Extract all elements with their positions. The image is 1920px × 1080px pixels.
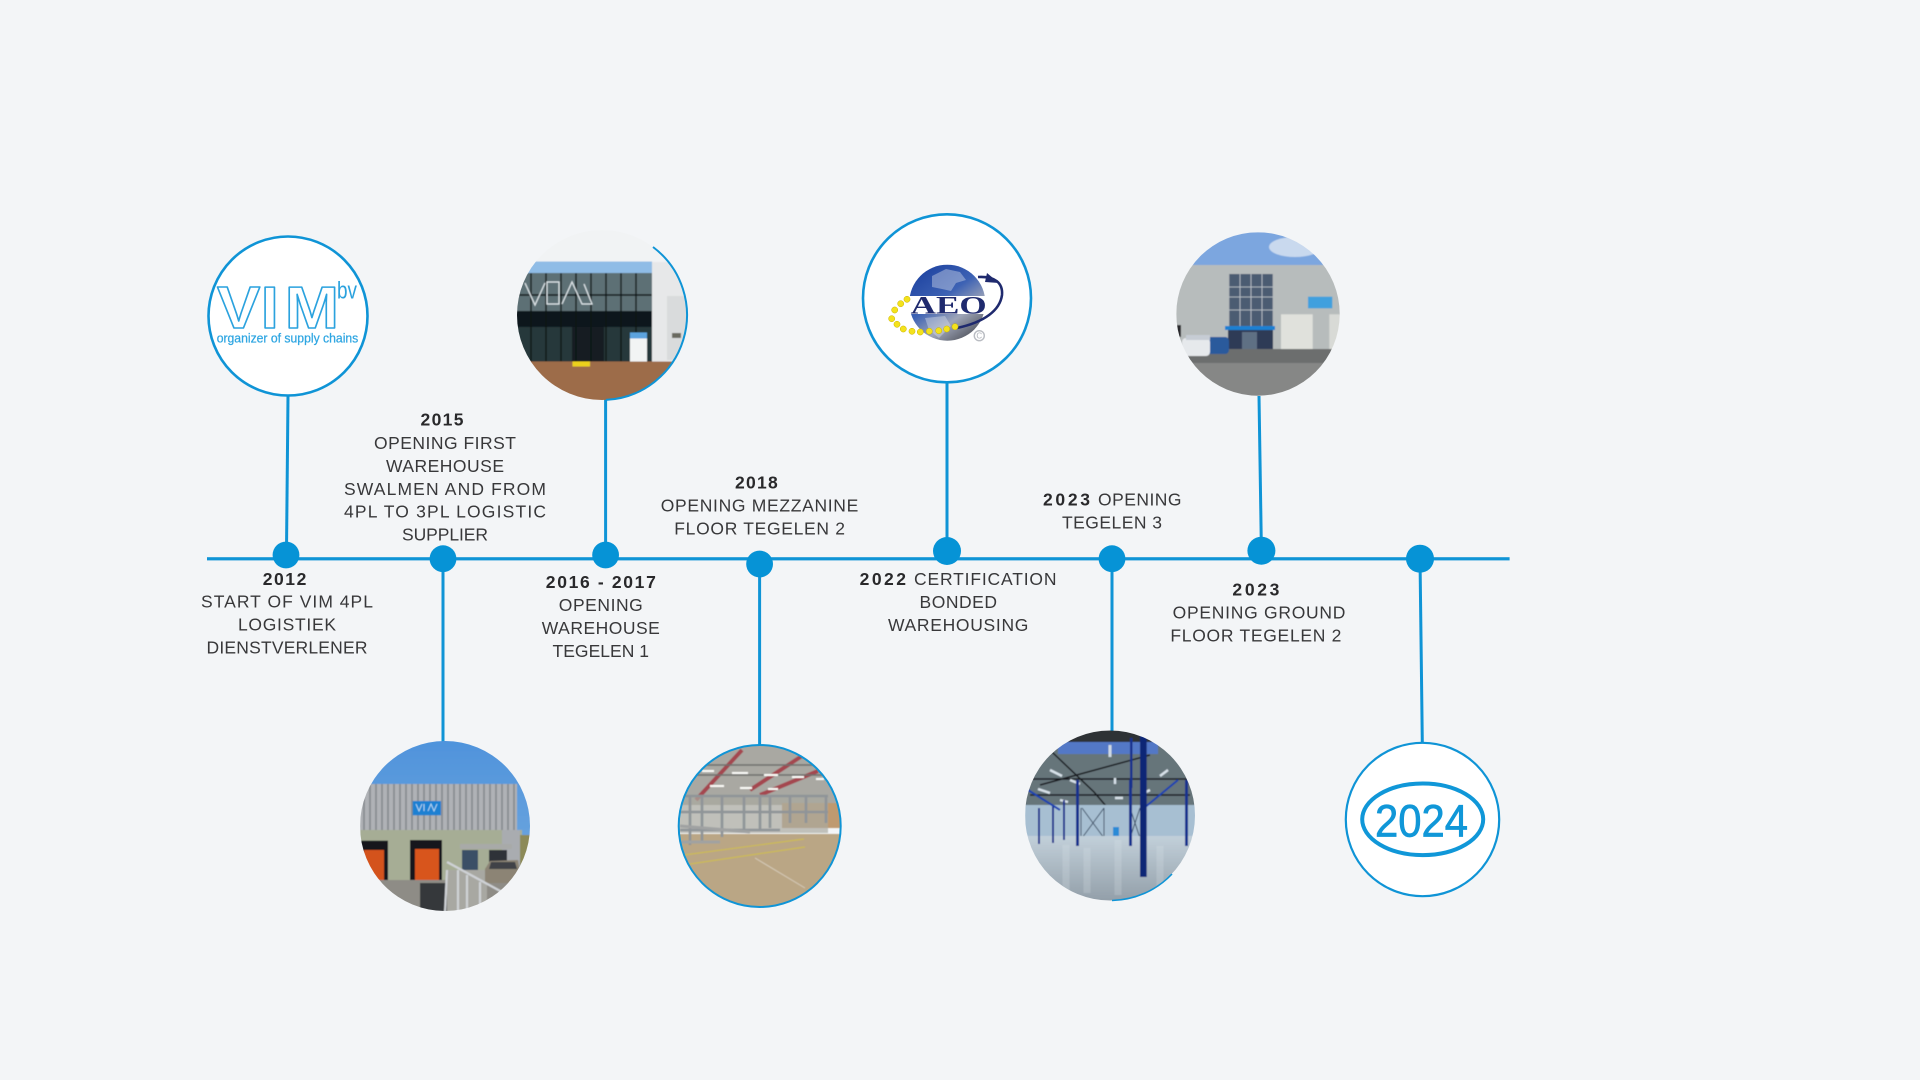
ground (378, 879, 508, 908)
copyright mark: C (976, 332, 982, 341)
railing (445, 862, 502, 913)
milestone 2023 ground floor: OPENING GROUND (1173, 603, 1345, 623)
milestone 2012: 2012 (263, 569, 307, 589)
sky (371, 741, 530, 836)
milestone 2015: SUPPLIER (402, 525, 488, 545)
roof purlins (690, 765, 830, 775)
milestone 2022: 2022 (860, 569, 906, 589)
stars (889, 296, 958, 335)
car (485, 860, 520, 883)
milestone 2023 ground floor (1170, 580, 1345, 646)
horizontal timeline axis (207, 557, 1510, 560)
back wall (1025, 805, 1196, 839)
logo suffix: bv (337, 278, 357, 304)
floor lines (684, 839, 805, 864)
timeline dots (273, 537, 1434, 577)
windows (1229, 274, 1273, 326)
circle: storefront photo (517, 261, 686, 400)
ceiling (678, 745, 842, 805)
wall sign (1308, 297, 1332, 308)
window lettering marks (525, 282, 592, 305)
milestone 2015: OPENING FIRST (374, 433, 516, 453)
ceiling (1026, 745, 1194, 806)
dock doors (1281, 314, 1313, 349)
milestone 2016-2017: 2016 - 2017 (546, 572, 656, 592)
milestone 2018: OPENING MEZZANINE (661, 496, 858, 516)
lights (702, 771, 824, 789)
logo tagline: organizer of supply chains (217, 331, 358, 345)
back wall (782, 803, 842, 828)
pillars (1038, 738, 1188, 846)
milestone 2022: WAREHOUSING (888, 615, 1028, 635)
storefront partial ring (606, 247, 687, 400)
milestone 2023 Tegelen 3: OPENING (1098, 490, 1182, 510)
milestone 2022 (860, 569, 1056, 635)
circle: warehouse photo (360, 740, 532, 913)
hand drawn ellipse (1362, 784, 1483, 855)
milestone 2022: CERTIFICATION (914, 569, 1056, 589)
milestone 2018: 2018 (735, 473, 778, 493)
milestone 2023 Tegelen 3 (1043, 490, 1182, 533)
milestone 2023 Tegelen 3: TEGELEN 3 (1062, 513, 1162, 533)
dock doors (360, 841, 388, 881)
wall (1176, 265, 1341, 350)
2024 label: 2024 (1375, 796, 1468, 846)
milestone 2015 (344, 410, 546, 545)
milestone 2012 (201, 569, 373, 658)
entrance (1228, 330, 1273, 349)
milestone 2016-2017: OPENING (559, 595, 643, 615)
globe (909, 265, 985, 341)
circle: 2024 (1346, 743, 1499, 896)
floor (1025, 836, 1196, 902)
right wall (652, 262, 684, 362)
blue sign (413, 801, 441, 815)
floor (678, 834, 842, 909)
glass facade (516, 273, 652, 362)
milestone 2015: SWALMEN AND FROM (344, 479, 546, 499)
circle: mezzanine shelving photo (678, 745, 842, 909)
milestone 2016-2017: WAREHOUSE (542, 618, 660, 638)
ceiling lights (1038, 770, 1168, 802)
milestone 2012: START OF VIM 4PL (201, 592, 373, 612)
timeline infographic (202, 213, 1510, 911)
milestone 2012: DIENSTVERLENER (206, 638, 368, 658)
tarmac (1176, 349, 1341, 363)
shelving (678, 795, 828, 833)
corrugated wall (360, 784, 517, 830)
milestone 2015: 4PL TO 3PL LOGISTIC (344, 502, 546, 522)
milestone 2016-2017 (542, 572, 660, 661)
milestone 2022: BONDED (920, 592, 997, 612)
milestone 2016-2017: TEGELEN 1 (552, 641, 649, 661)
orbit arrow (957, 277, 1002, 328)
circle: building photo (1176, 232, 1341, 397)
green lower wall (360, 830, 522, 886)
milestone 2015: WAREHOUSE (386, 456, 504, 476)
circle: empty hall photo (1025, 730, 1196, 902)
milestone 2012: LOGISTIEK (238, 615, 336, 635)
fascia band (526, 262, 652, 273)
milestone 2023 ground floor: FLOOR TEGELEN 2 (1170, 626, 1341, 646)
canopy and entrance (460, 844, 502, 849)
circle: AEO logo (863, 214, 1031, 382)
connector stems (286, 383, 1422, 746)
circle: VIM logo (208, 236, 368, 396)
milestone 2018 (661, 473, 858, 539)
logo wordmark VIM: VIM (217, 276, 339, 341)
AEO lettering: AEO (911, 292, 987, 319)
parked cars (1176, 325, 1181, 337)
milestone 2023 Tegelen 3: 2023 (1043, 490, 1090, 510)
milestone 2023 ground floor: 2023 (1232, 580, 1280, 600)
copyright mark (974, 331, 984, 341)
milestone 2015: 2015 (420, 410, 464, 430)
white band (909, 296, 987, 314)
red beams (696, 750, 818, 800)
milestone 2018: FLOOR TEGELEN 2 (674, 519, 845, 539)
sign board (630, 332, 647, 362)
sky (1192, 232, 1324, 266)
brick pavement (530, 360, 672, 400)
